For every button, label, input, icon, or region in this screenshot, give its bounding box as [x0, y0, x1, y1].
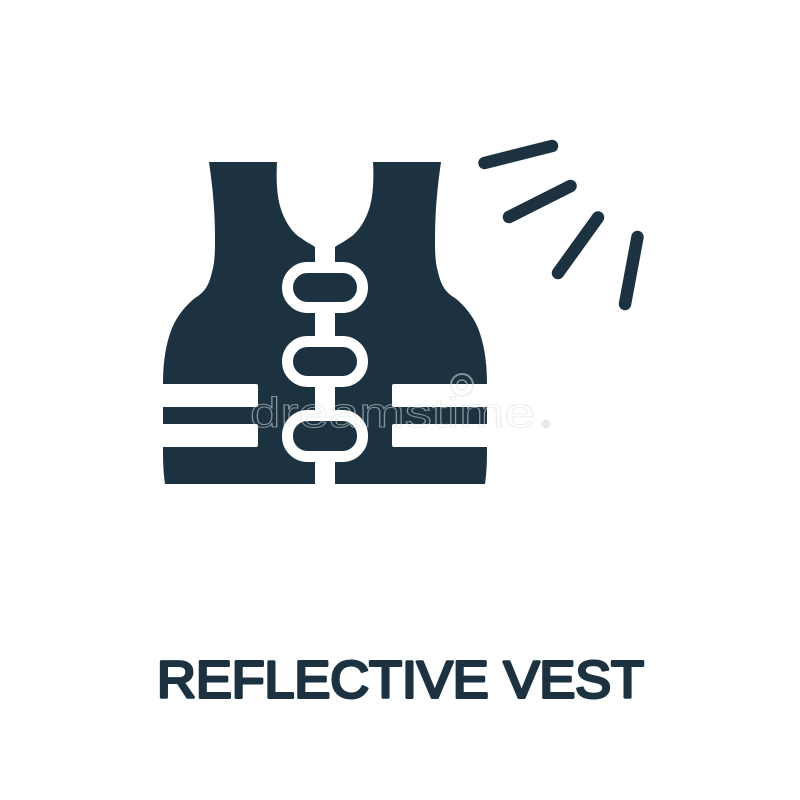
- icon: reflective vest: [163, 162, 487, 484]
- ray 4: [625, 237, 638, 304]
- vest left panel: [163, 162, 315, 484]
- right reflective stripes: [392, 384, 500, 447]
- icon: reflection rays: [484, 146, 638, 304]
- left reflective stripes: [150, 384, 258, 447]
- title: REFLECTIVE VEST: [157, 652, 644, 710]
- ray 1: [484, 146, 552, 163]
- ray 3: [558, 218, 598, 273]
- buckle 1: [288, 268, 362, 308]
- vest right panel: [335, 162, 487, 484]
- ray 2: [509, 186, 570, 217]
- watermark: dreamstime: [250, 389, 535, 436]
- buckle 2: [288, 342, 362, 382]
- buckle 3: [288, 416, 362, 456]
- vest buckles: [288, 268, 362, 456]
- watermark: [250, 374, 550, 436]
